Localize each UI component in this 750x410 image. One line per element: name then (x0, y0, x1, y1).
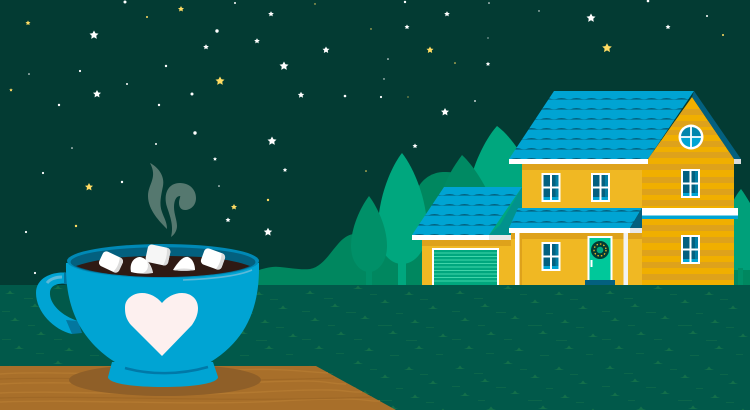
porch columns (515, 233, 628, 285)
side wall with gable (642, 97, 734, 285)
marshmallow 1 (98, 250, 124, 274)
wooden table (0, 366, 396, 410)
window: lower left (542, 242, 560, 271)
cup inner (70, 247, 256, 277)
window: side lower (681, 235, 700, 264)
garage wall (422, 240, 517, 285)
marshmallow 3 (200, 247, 226, 271)
marshmallow 4 (131, 257, 153, 274)
window: upper middle (591, 173, 610, 202)
garage (412, 187, 522, 285)
night sky (0, 0, 750, 290)
cup foot (108, 362, 218, 387)
lawn (0, 285, 750, 410)
cocoa (76, 256, 250, 277)
yellow stars (9, 3, 724, 227)
tree: bright left (378, 153, 427, 285)
wreath (591, 241, 609, 259)
background hills (256, 230, 420, 285)
cup (36, 244, 259, 387)
porch roof (509, 208, 642, 233)
main wall lower (511, 233, 642, 285)
cup handle (36, 273, 82, 334)
cup foot line (125, 367, 208, 373)
windows (542, 169, 700, 271)
steam: right wisp (166, 183, 196, 237)
garage roof (412, 187, 522, 240)
main roof (509, 91, 741, 164)
garage door (432, 248, 499, 285)
steam: left wisp (148, 163, 167, 229)
tree: round hill behind house (412, 172, 510, 285)
heart (125, 293, 198, 356)
window: upper left (542, 173, 560, 202)
side band (642, 208, 738, 219)
background trees (351, 126, 750, 285)
window: side upper (681, 169, 700, 198)
tree: tall back (468, 126, 530, 285)
tree: darker back (441, 155, 490, 196)
door with wreath (585, 236, 615, 285)
tree: small dark left (351, 196, 387, 285)
cup shadow (69, 364, 261, 396)
marshmallow 5 (173, 257, 195, 271)
house (412, 91, 741, 285)
cup rim (67, 244, 259, 278)
marshmallows (98, 244, 226, 274)
white stars (25, 0, 708, 274)
steam (148, 163, 196, 237)
marshmallow 2 (145, 244, 171, 266)
tree: right edge (728, 189, 750, 285)
round attic window (678, 124, 704, 150)
main wall upper (522, 164, 642, 208)
cup rim highlight (183, 270, 252, 280)
cup body (66, 263, 259, 368)
